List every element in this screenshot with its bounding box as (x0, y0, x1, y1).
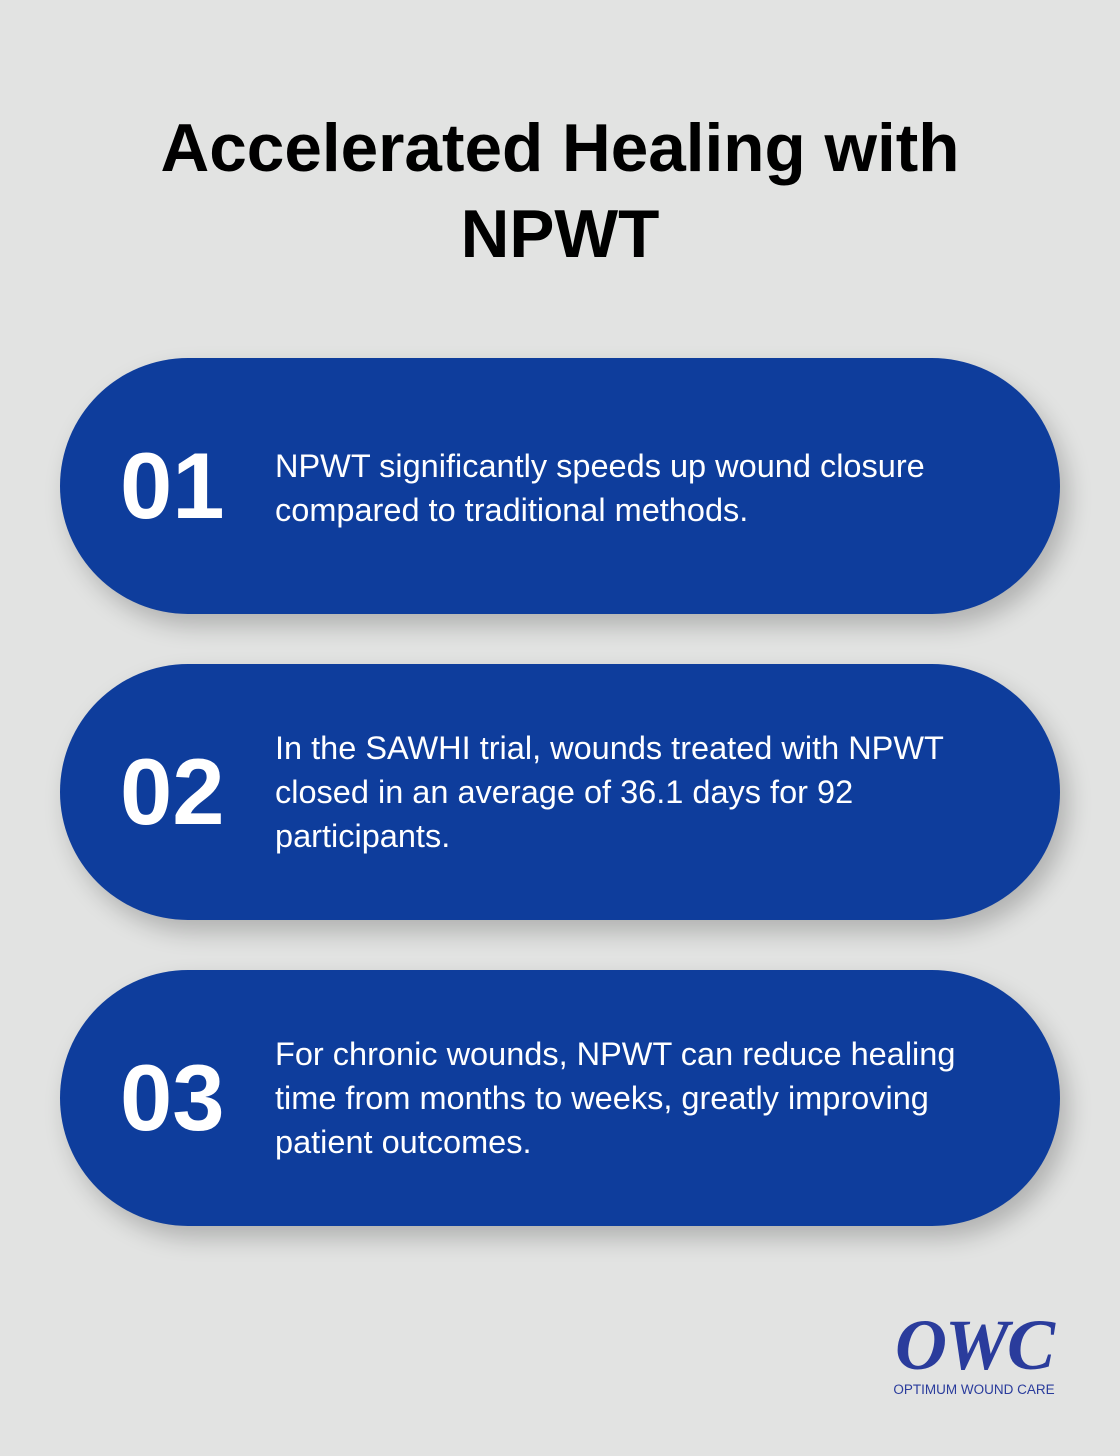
card 2 (60, 664, 1060, 920)
logo: OWC (895, 1305, 1053, 1385)
number 02: 02 (120, 739, 225, 844)
title (160, 111, 960, 272)
card 3 (60, 970, 1060, 1226)
card 1 (60, 358, 1060, 614)
text 3: For chronic wounds, NPWT can reduce healing time from months to weeks, greatly improving patient outcomes. (275, 1036, 955, 1160)
text 2: In the SAWHI trial, wounds treated with NPWT closed in an average of 36.1 days for 92 participants. (275, 730, 943, 854)
title: NPWT (461, 197, 659, 272)
title: Accelerated Healing with (160, 111, 960, 186)
text 1: NPWT significantly speeds up wound closure compared to traditional methods. (275, 448, 925, 528)
logo: OPTIMUM WOUND CARE (893, 1382, 1055, 1397)
number 03: 03 (120, 1045, 225, 1150)
number 01: 01 (120, 433, 225, 538)
